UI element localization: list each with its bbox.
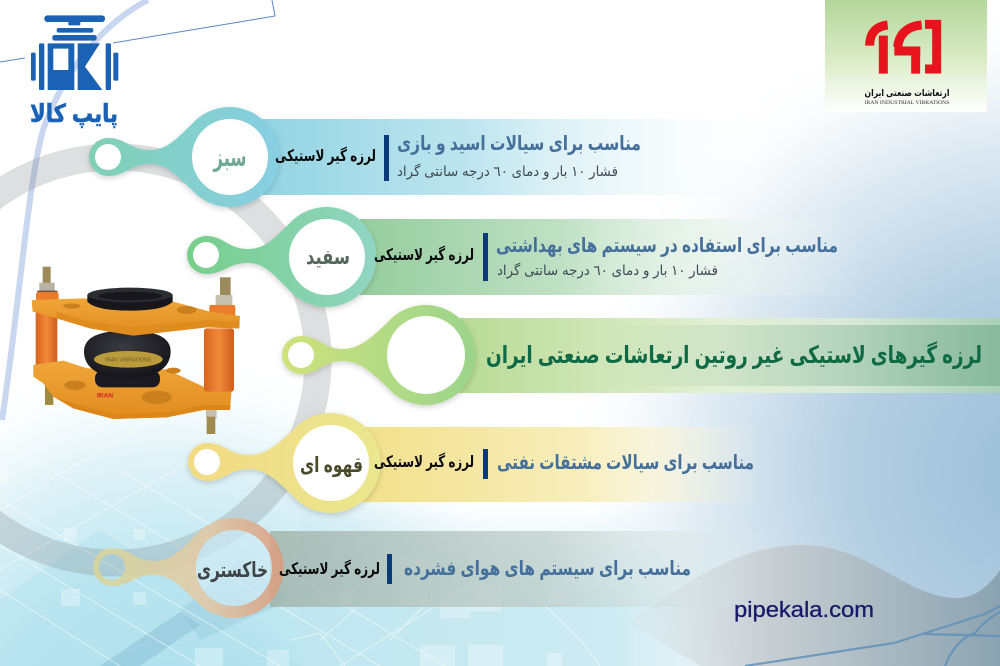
band xyxy=(360,427,780,502)
iran vibrations logo: IRAN INDUSTRIAL VIBRATIONS xyxy=(864,100,950,106)
row 3: main title xyxy=(282,305,1000,405)
row 4: brown rubber xyxy=(188,413,780,513)
iran vibrations logo xyxy=(825,0,987,112)
color badge: سبز xyxy=(212,144,246,173)
website: pipekala.com xyxy=(734,597,874,622)
band xyxy=(450,318,1000,393)
color badge xyxy=(293,425,369,501)
small dot xyxy=(194,449,220,475)
color badge: قهوه ای xyxy=(300,454,363,477)
pale arc xyxy=(2,0,148,420)
connector xyxy=(188,413,381,513)
row 5: gray rubber xyxy=(93,518,780,618)
band xyxy=(270,531,780,607)
color badge xyxy=(192,119,268,195)
color badge: سفید xyxy=(306,246,350,269)
connector xyxy=(282,305,476,405)
details: فشار ١٠ بار و دمای ٦٠ درجه سانتی گراد xyxy=(497,262,718,279)
connector xyxy=(89,107,280,207)
color badge xyxy=(196,530,272,606)
color badge: خاکستری xyxy=(197,559,268,582)
label: لرزه گیر لاستیکی xyxy=(275,146,376,165)
row 2: white rubber xyxy=(187,207,860,307)
product photo: rubber expansion joint: IRAN xyxy=(97,392,113,399)
heading: مناسب برای استفاده در سیستم های بهداشتی xyxy=(496,235,838,257)
gray ring xyxy=(0,157,318,563)
connector xyxy=(93,518,284,618)
label: لرزه گیر لاستیکی xyxy=(374,452,474,471)
iran vibrations logo: ارتعاشات صنعتی ایران xyxy=(864,88,950,99)
connector xyxy=(187,207,377,307)
small dot xyxy=(95,144,121,170)
product photo: rubber expansion joint xyxy=(32,267,240,434)
pipekala logo xyxy=(30,15,118,128)
heading: مناسب برای سیالات مشتقات نفتی xyxy=(497,452,754,474)
small dot xyxy=(193,242,219,268)
thin line top xyxy=(0,0,275,62)
label: لرزه گیر لاستیکی xyxy=(279,559,380,578)
row 1: green rubber xyxy=(89,107,792,207)
product photo: rubber expansion joint: IRAN VIBRATIONS xyxy=(105,357,152,363)
details: فشار ١٠ بار و دمای ٦٠ درجه سانتی گراد xyxy=(397,163,618,180)
divider xyxy=(483,233,488,281)
color badge xyxy=(289,219,365,295)
empty badge xyxy=(387,316,465,394)
band xyxy=(262,119,792,195)
pipekala logo: پایپ کالا xyxy=(30,100,118,128)
heading: مناسب برای سیالات اسید و بازی xyxy=(397,133,641,155)
divider xyxy=(384,135,389,181)
heading: مناسب برای سیستم های هوای فشرده xyxy=(404,558,691,580)
label: لرزه گیر لاستیکی xyxy=(374,245,474,264)
divider xyxy=(483,449,488,479)
divider xyxy=(387,554,392,584)
small dot xyxy=(288,342,314,368)
band xyxy=(360,219,860,295)
